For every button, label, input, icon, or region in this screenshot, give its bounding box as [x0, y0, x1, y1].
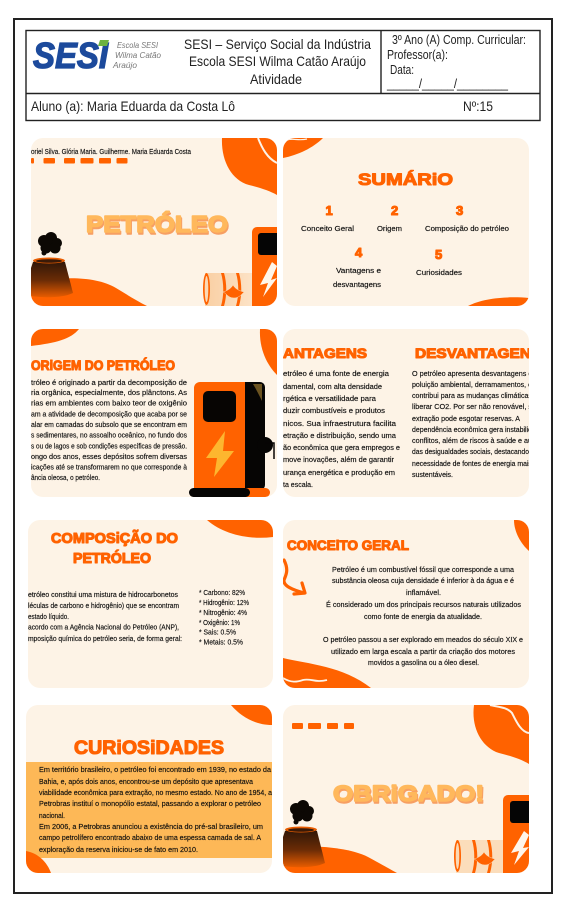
body text: mposição química do petróleo seria, de forma geral: [28, 634, 182, 643]
dashes [292, 723, 354, 729]
class and date fields: 3º Ano (A) Comp. Curricular: [392, 32, 526, 47]
body text: utilizado em larga escala a partir da criação dos motores [331, 647, 515, 656]
student number: Nº:15 [463, 98, 493, 114]
advantages text: duzir combustíveis e produtos [283, 406, 385, 415]
body text: icações até se transformarem no que corresponde à [31, 462, 187, 472]
bottom left blob [283, 658, 371, 688]
arrow [284, 560, 305, 594]
icon: barrel [203, 273, 253, 306]
top left blob [31, 329, 79, 346]
body text: campo petrolífero encontrado abaixo de uma espessa camada de sal. A [39, 833, 261, 842]
SESI logo: SESI [33, 35, 109, 76]
student name: Aluno (a): Maria Eduarda da Costa Lô [31, 98, 235, 114]
title: ORiGEM DO PETRÓLEO [31, 358, 175, 373]
title: CONCEiTO GERAL [287, 538, 409, 553]
top right blob [514, 520, 529, 551]
body text: alar em camadas do subsolo que se encontram em [31, 420, 187, 429]
slide 3: origin [31, 329, 277, 497]
item 4: Vantagens e [336, 266, 381, 275]
advantages text: nicos. Sua infraestrutura facilita [283, 419, 396, 428]
item 4: desvantagens [333, 280, 381, 289]
body text: estado líquido. [28, 612, 69, 621]
body text: Bahia, e, após dois anos, encontrou-se um depósito que apresentava [39, 777, 253, 786]
body text: acordo com a Agência Nacional do Petróleo (ANP), [28, 622, 179, 632]
icon: volcano [283, 826, 325, 867]
title: OBRiGADO! [334, 783, 485, 808]
composition list: * Hidrogênio: 12% [199, 598, 250, 607]
composition list: * Carbono: 82% [199, 588, 246, 597]
top right blob [222, 138, 277, 195]
slide 8: thank you [283, 705, 529, 873]
top right blob [260, 329, 277, 375]
body text: movidos a gasolina ou a óleo diesel. [368, 658, 479, 667]
icon: smoke [290, 800, 314, 824]
disadvantages heading: DESVANTAGEN [415, 346, 529, 361]
body text: O petróleo passou a ser explorado em meados do século XIX e [323, 635, 523, 644]
body text: am a atividade de decomposição que acaba por se [31, 410, 187, 418]
icon: smoke [38, 232, 62, 256]
bottom blob [283, 846, 397, 873]
composition list: * Nitrogênio: 4% [199, 608, 248, 617]
advantages text: etróleo é uma fonte de energia [283, 369, 389, 378]
bottom blob [31, 278, 147, 306]
school name: Escola SESI Wilma Catão Araújo [189, 53, 366, 69]
top right blob [473, 705, 529, 764]
advantages text [283, 369, 400, 489]
composition list: * Metais: 0.5% [199, 638, 244, 646]
composition list: * Sais: 0.5% [199, 628, 237, 636]
slide 2: summary [283, 138, 529, 306]
item 4 [333, 245, 381, 289]
authors line: oriel Silva. Glória Maria. Guilherme. Maria Eduarda Costa [31, 147, 191, 156]
body text: inflamável. [406, 588, 441, 597]
item 5 [416, 247, 462, 277]
class and date fields: Professor(a): [387, 47, 448, 62]
slide 6: general concept [283, 520, 529, 688]
body text: etróleo constitui uma mistura de hidrocarbonetos [28, 590, 178, 599]
class and date fields: Data: [390, 62, 414, 77]
top right blob [231, 705, 272, 725]
body text: léculas de carbono e hidrogênio) que se encontram [28, 601, 179, 610]
composition list [199, 588, 250, 646]
disadvantages text: extração pode esgotar reservas. A [412, 414, 520, 423]
body text: É considerado um dos principais recursos naturais utilizados [326, 600, 521, 609]
item 2 [377, 203, 402, 233]
slide 4: advantages and disadvantages [283, 329, 529, 497]
SESI logo: Escola SESI [117, 41, 159, 50]
body text: s ou de lagos e sob condições específicas de pressão. [31, 442, 187, 450]
bottom left blob [26, 851, 51, 873]
body text [39, 765, 272, 854]
title: SUMÁRiO [358, 170, 453, 189]
item 1: 1 [326, 203, 333, 218]
body text: ongo dos anos, esses depósitos sofrem diversas [31, 452, 187, 461]
advantages text: ão econômica que gera empregos e [283, 443, 400, 452]
icon: fuel pump [252, 227, 280, 306]
body text: rias em ambientes com baixo teor de oxigênio [31, 398, 187, 408]
disadvantages text: sustentáveis. [412, 470, 453, 479]
body text: substância oleosa cuja densidade é inferior à da água e é [332, 576, 514, 585]
title: OBRiGADO! [333, 781, 484, 806]
school name: Atividade [250, 71, 302, 87]
icon: fuel pump [503, 795, 532, 873]
SESI logo [33, 35, 162, 76]
text band [26, 762, 272, 858]
advantages text: move inovações, além de garantir [283, 455, 395, 464]
body text: ância oleosa, o petróleo. [31, 473, 100, 482]
disadvantages text: conflitos, além de riscos à saúde e au [412, 436, 529, 445]
title: PETRÓLEO [87, 212, 229, 239]
advantages text: rgética e versatilidade para [283, 394, 376, 403]
disadvantages text [412, 369, 532, 479]
body text [28, 590, 182, 643]
SESI logo: Araújo [112, 61, 138, 70]
SESI logo: Wilma Catão [115, 51, 162, 60]
item 3: Composição do petróleo [425, 224, 509, 233]
body text: nacional. [39, 811, 65, 820]
dashes [31, 158, 128, 164]
top left blob [283, 138, 323, 158]
slide 5: composition [28, 520, 273, 688]
advantages heading: ANTAGENS [283, 346, 367, 361]
title: PETRÓLEO [73, 549, 151, 567]
icon: fuel pump [189, 382, 274, 497]
body text [323, 565, 523, 667]
item 3: 3 [456, 203, 463, 218]
item 4: 4 [355, 245, 363, 260]
body text: exploração da reserva iniciou-se de fato em 2010. [39, 845, 198, 854]
body text: s sedimentares, no assoalho oceânico, no fundo dos [31, 430, 187, 440]
body text: Petrobras instituí o monopólio estatal, passando a explorar o petróleo [39, 799, 261, 808]
item 5: Curiosidades [416, 268, 462, 277]
header table [26, 30, 540, 120]
item 3 [425, 203, 509, 233]
class and date fields: _____/_____/________ [386, 76, 509, 91]
body text: tróleo é originado a partir da decomposição de [31, 378, 187, 387]
body text [31, 378, 187, 482]
item 2: 2 [391, 203, 398, 218]
school name: SESI – Serviço Social da Indústria [184, 36, 371, 52]
body text: Petróleo é um combustível fóssil que corresponde a uma [332, 565, 514, 574]
item 1: Conceito Geral [301, 224, 354, 233]
body text: ria orgânica, especialmente, dos plânctons. As [31, 388, 187, 397]
disadvantages text: O petróleo apresenta desvantagens c [412, 369, 529, 378]
advantages text: ta escala. [283, 480, 313, 489]
body text: Em 2006, a Petrobras anunciou a existência do pré-sal brasileiro, um [39, 822, 263, 831]
body text: Em território brasileiro, o petróleo foi encontrado em 1939, no estado da [39, 765, 271, 774]
item 5: 5 [435, 247, 442, 262]
disadvantages text: liberar CO2. Por ser não renovável, s [412, 402, 529, 411]
item 2: Origem [377, 224, 402, 233]
item 1 [301, 203, 354, 233]
advantages text: damental, com alta densidade [283, 382, 382, 391]
class and date fields [386, 32, 526, 91]
body text: como fonte de energia da atualidade. [364, 612, 482, 621]
top right blob [207, 520, 273, 538]
title: COMPOSiÇÃO DO [51, 529, 178, 547]
icon: barrel [454, 840, 504, 873]
advantages text: etração e distribuição, sendo uma [283, 431, 396, 440]
title: CURiOSiDADES [74, 738, 224, 759]
title [51, 529, 178, 567]
bottom right blob [468, 297, 529, 306]
school name [184, 36, 371, 87]
advantages text: urança energética e produção em [283, 468, 395, 477]
icon: volcano [31, 258, 73, 297]
title: PETRÓLEO [86, 210, 228, 237]
composition list: * Oxigênio: 1% [199, 618, 241, 627]
slide 7: curiosities [26, 705, 272, 873]
slide 1: cover [31, 138, 277, 306]
